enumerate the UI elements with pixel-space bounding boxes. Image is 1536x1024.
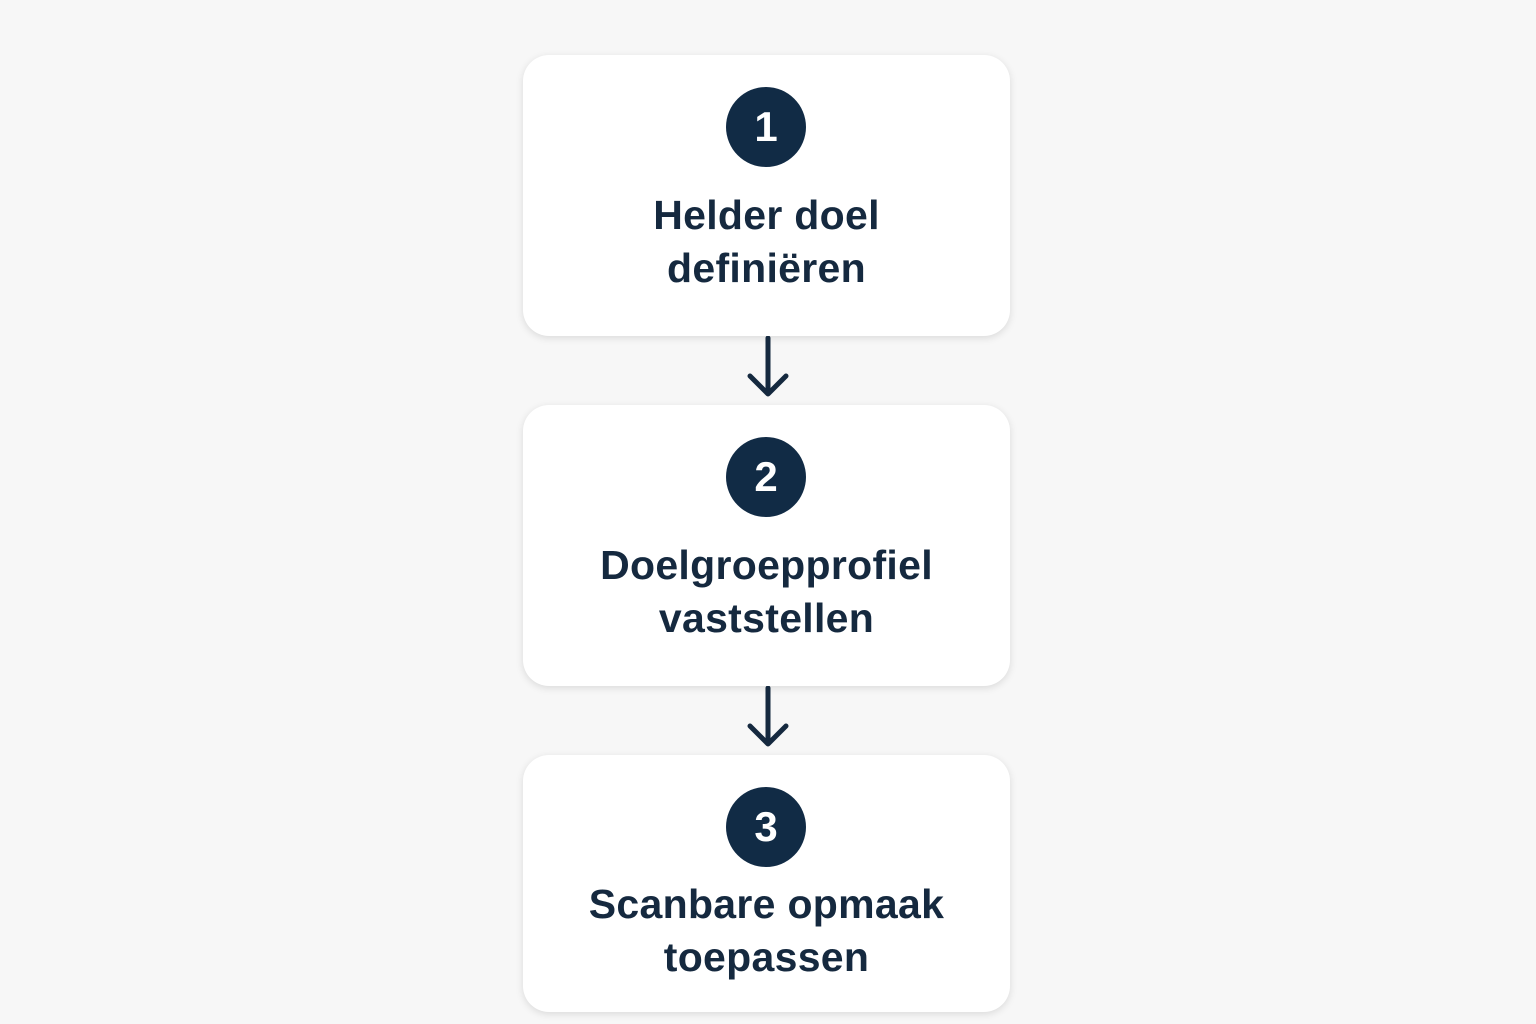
step 1 text: Helder doel	[653, 192, 880, 238]
card 3	[523, 755, 1010, 1012]
step number 2	[726, 437, 806, 517]
arrow 1	[748, 336, 788, 396]
step number 3: 3	[754, 803, 778, 850]
card 2	[523, 405, 1010, 686]
step number 1	[726, 87, 806, 167]
step 2 text: vaststellen	[659, 595, 874, 641]
card 1	[523, 55, 1010, 336]
step number 3	[726, 787, 806, 867]
step 3 text: Scanbare opmaak	[589, 881, 944, 927]
step 2 text	[600, 542, 933, 641]
step number 2: 2	[754, 453, 778, 500]
step number 1: 1	[754, 103, 778, 150]
arrow 2	[748, 686, 788, 746]
step 2 text: Doelgroepprofiel	[600, 542, 933, 588]
step 3 text	[589, 881, 944, 980]
step 3 text: toepassen	[664, 934, 869, 980]
step 1 text	[653, 192, 880, 291]
step 1 text: definiëren	[667, 245, 866, 291]
